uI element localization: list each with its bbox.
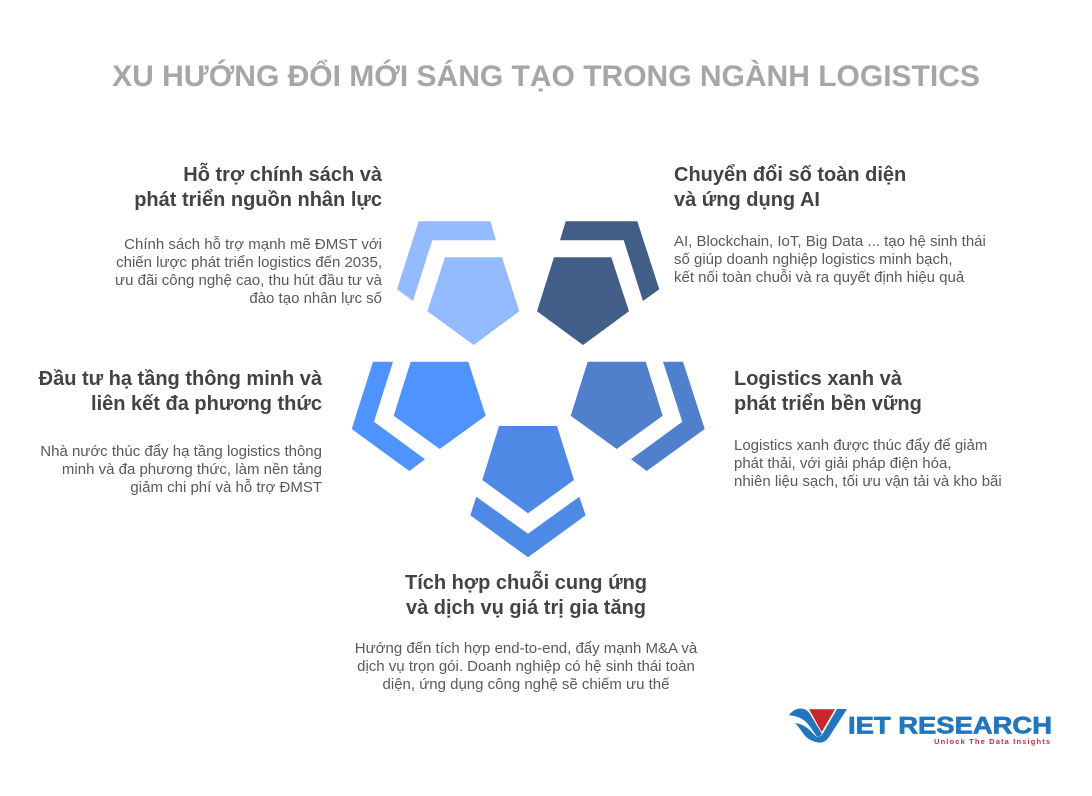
logo: Viet Research [789,708,1052,746]
heading: và ứng dụng AI [674,189,820,211]
heading: Tích hợp chuỗi cung ứng [405,572,647,594]
title: XU HƯỚNG ĐỔI MỚI SÁNG TẠO TRONG NGÀNH LOGISTICS [112,60,980,93]
text block: diện, ứng dụng công nghệ sẽ chiếm ưu thế [383,676,669,693]
pentagon segment: policy support (light blue) [397,221,519,345]
heading: Hỗ trợ chính sách và [183,164,382,186]
panel: policy support [115,162,382,307]
text block: phát thải, với giải pháp điện hóa, [734,455,952,472]
icon: logo mark [789,708,847,743]
text block [674,233,986,286]
heading [38,368,322,415]
logo wordmark: IET RESEARCH [848,712,1052,740]
text block: dịch vụ trọn gói. Doanh nghiệp có hệ sinh thái toàn [357,658,695,675]
heading [134,162,382,211]
heading [674,164,906,211]
text block: Hướng đến tích hợp end-to-end, đẩy mạnh M&A và [355,640,697,657]
text block: số giúp doanh nghiệp logistics minh bạch, [674,251,953,268]
text block: minh và đa phương thức, làm nền tảng [62,461,322,478]
text block: Logistics xanh được thúc đẩy để giảm [734,437,987,454]
logo tagline: Unlock The Data Insights [934,737,1050,746]
heading [734,368,922,415]
heading: phát triển bền vững [734,393,922,415]
text block [115,236,382,307]
text block: đào tạo nhân lực số [249,290,382,307]
heading: liên kết đa phương thức [91,393,322,415]
heading [405,570,647,619]
text block: giảm chi phí và hỗ trợ ĐMST [130,479,322,496]
text block [40,443,322,496]
text block: chiến lược phát triển logistics đến 2035, [116,254,382,271]
text block: Chính sách hỗ trợ mạnh mẽ ĐMST với [124,236,382,253]
panel: digital transformation [674,164,986,286]
panel: smart infrastructure [38,368,322,496]
heading: Chuyển đổi số toàn diện [674,164,906,186]
pentagon segment: supply chain integration (mid blue) [470,426,586,557]
text block [355,640,698,693]
text block: AI, Blockchain, IoT, Big Data ... tạo hệ sinh thái [674,233,986,250]
panel: supply chain integration [355,570,698,693]
heading: và dịch vụ giá trị gia tăng [406,597,646,619]
panel: green logistics [734,368,1002,490]
heading: Đầu tư hạ tầng thông minh và [39,368,322,390]
text block [734,437,1002,490]
text block: Nhà nước thúc đẩy hạ tầng logistics thông [40,443,322,460]
pentagon segment: digital transformation (dark blue) [537,221,659,345]
heading: Logistics xanh và [734,368,902,390]
pentagon segment: green logistics (steel blue) [571,362,705,471]
text block: ưu đãi công nghệ cao, thu hút đầu tư và [115,272,382,289]
heading: phát triển nguồn nhân lực [134,189,382,211]
text block: nhiên liệu sạch, tối ưu vận tải và kho bãi [734,473,1002,490]
text block: kết nối toàn chuỗi và ra quyết định hiệu quả [674,269,964,286]
pentagon segment: smart infrastructure (bright blue) [352,362,486,471]
